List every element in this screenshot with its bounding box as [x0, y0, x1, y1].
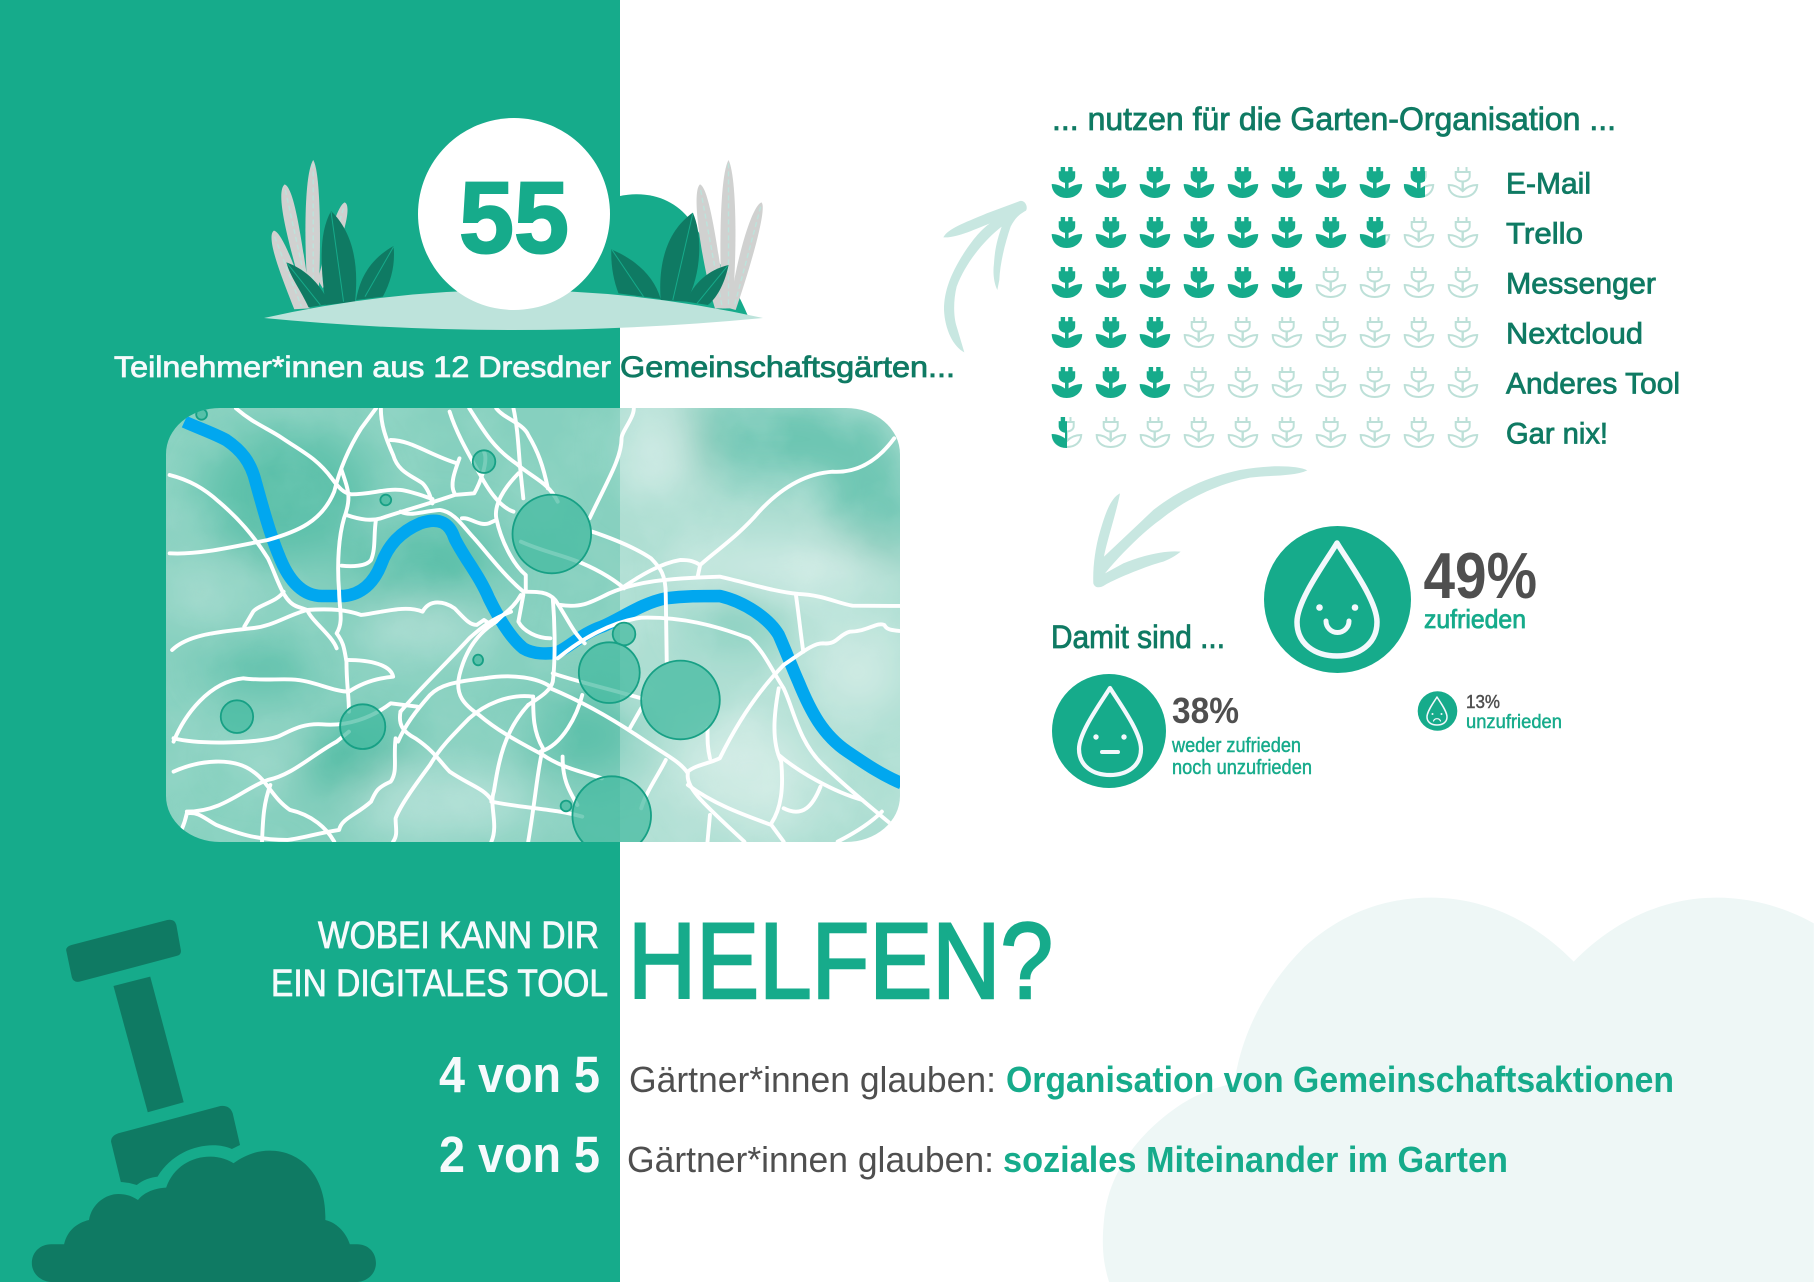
stat: 49 percent satisfied: zufrieden: [1424, 604, 1526, 634]
participants illustration: [264, 118, 763, 330]
row: E-Mail: E-Mail: [1506, 168, 1591, 200]
garden location circles: [196, 409, 720, 855]
stat: 38 percent neutral: [1052, 674, 1312, 788]
right plants: [611, 160, 763, 310]
arrow: to tools: [943, 201, 1027, 352]
river Elbe: [184, 422, 902, 783]
row: Messenger: [1052, 267, 1656, 300]
ground: [264, 290, 763, 330]
finding: social interaction: soziales Miteinander im Garten: [1003, 1139, 1508, 1180]
finding: community actions: Gärtner*innen glauben:: [629, 1059, 996, 1100]
watercolor background: [160, 395, 941, 842]
row: Messenger: Messenger: [1506, 268, 1656, 300]
icon: shovel and soil: [32, 920, 376, 1282]
heading: question: [271, 900, 1053, 1021]
stat: 49 percent satisfied: 49%: [1424, 539, 1537, 612]
row: Trello: Trello: [1506, 218, 1583, 250]
arrow: to satisfaction: [1093, 466, 1307, 587]
row: Nextcloud: [1052, 317, 1643, 350]
finding: social interaction: Gärtner*innen glauben:: [627, 1139, 994, 1180]
row: Trello: [1052, 217, 1583, 250]
number: 55: [459, 162, 569, 274]
row: Gar nix: Gar nix!: [1506, 418, 1608, 450]
heading: tools: ... nutzen für die Garten-Organisation ...: [1052, 101, 1616, 137]
stat: 13 percent unsatisfied: unzufrieden: [1466, 711, 1562, 733]
row: Gar nix: [1052, 417, 1608, 450]
row: Anderes Tool: Anderes Tool: [1506, 368, 1680, 400]
panel: green left background: [0, 0, 620, 1282]
map of Dresden: [166, 408, 900, 842]
finding: community actions: 4 von 5: [439, 1046, 600, 1103]
heading: question: HELFEN?: [628, 900, 1053, 1021]
row: E-Mail: [1052, 167, 1591, 200]
stat: 38 percent neutral: noch unzufrieden: [1172, 756, 1312, 779]
background cloud: [1103, 898, 1814, 1282]
subtitle: participants: Teilnehmer*innen aus 12 Dresdner: [114, 351, 611, 384]
subtitle: participants: Gemeinschaftsgärten...: [620, 351, 955, 384]
heading: question: WOBEI KANN DIR: [318, 915, 599, 957]
row: Anderes Tool: [1052, 367, 1680, 400]
stat: 49 percent satisfied: [1264, 526, 1537, 673]
heading: question: EIN DIGITALES TOOL: [271, 963, 608, 1005]
left plants: [272, 160, 394, 309]
stat: 38 percent neutral: 38%: [1172, 690, 1239, 731]
stat: 13 percent unsatisfied: 13%: [1466, 692, 1500, 712]
pictogram chart: tools used: [1052, 167, 1680, 450]
subtitle: participants: [114, 351, 955, 384]
finding: social interaction: 2 von 5: [439, 1126, 600, 1183]
row: Nextcloud: Nextcloud: [1506, 318, 1643, 350]
finding: community actions: Organisation von Gemeinschaftsaktionen: [1006, 1059, 1674, 1100]
street network: [170, 408, 900, 842]
white circle: [418, 118, 610, 310]
stat: 38 percent neutral: weder zufrieden: [1171, 734, 1301, 757]
finding: social interaction: [439, 1126, 1508, 1183]
heading: satisfaction: Damit sind ...: [1051, 619, 1225, 655]
finding: community actions: [439, 1046, 1674, 1103]
hill behind right plants: [620, 194, 748, 320]
stat: 13 percent unsatisfied: [1418, 691, 1562, 733]
